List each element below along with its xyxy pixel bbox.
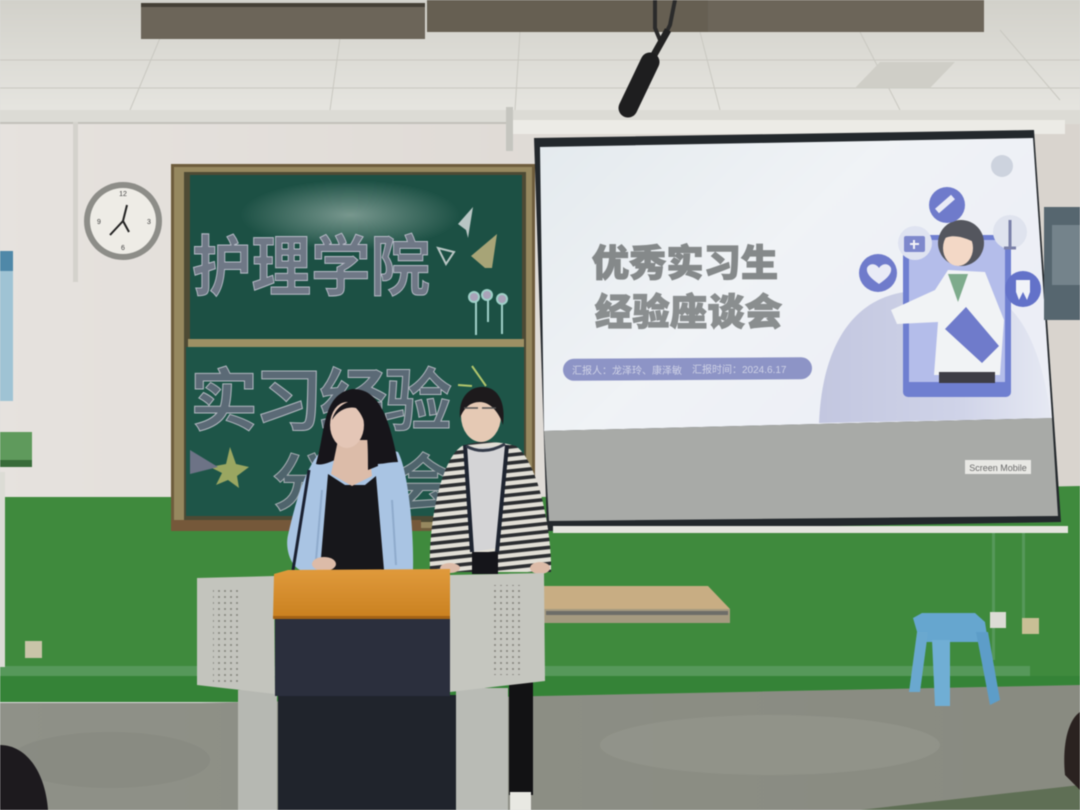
lectern left wing bbox=[197, 576, 275, 694]
slide title: 优秀实习生 bbox=[592, 242, 778, 284]
left wall poster bbox=[0, 251, 13, 401]
wall clock bbox=[84, 182, 162, 260]
screen brand label bbox=[965, 460, 1031, 474]
chalk heading: nursing school: 护理学院 bbox=[192, 230, 430, 304]
presenter pill: 汇报人：龙泽玲、康泽敏 bbox=[572, 364, 682, 377]
person: speaker in blue cardigan bbox=[287, 389, 413, 571]
slide subtitle: 经验座谈会 bbox=[595, 291, 782, 333]
wall clock: 12 bbox=[119, 191, 127, 198]
microphone stand bbox=[293, 470, 309, 570]
floor bbox=[0, 685, 1080, 810]
black top bbox=[320, 474, 384, 570]
lectern navy centre bbox=[275, 618, 450, 696]
lectern bbox=[197, 569, 545, 810]
wall clock: 9 bbox=[97, 219, 101, 226]
ceiling light fixtures bbox=[141, 0, 984, 39]
presenter pill: 汇报时间：2024.6.17 bbox=[692, 363, 787, 376]
doctor coat bbox=[891, 270, 1004, 375]
wall clock: 6 bbox=[121, 245, 125, 252]
chalk paper planes bbox=[438, 207, 497, 268]
ceiling bbox=[0, 0, 1080, 112]
wall bbox=[0, 112, 1080, 498]
side table bbox=[544, 586, 730, 623]
lectern base bbox=[238, 688, 508, 810]
green wall box bbox=[0, 432, 42, 667]
presenter pill bbox=[563, 357, 812, 381]
screen brand label: Screen Mobile bbox=[969, 463, 1027, 473]
chalk flowers bbox=[469, 290, 507, 335]
projector mount and microphone bbox=[506, 0, 675, 151]
icon: first aid bubble bbox=[898, 226, 932, 260]
green wainscot bbox=[0, 486, 1080, 702]
illustration: doctor in phone bbox=[819, 155, 1051, 423]
icon: medicine bubble bbox=[929, 187, 965, 223]
panel: chalkboard bbox=[171, 164, 535, 531]
chalk constellation bbox=[458, 366, 486, 386]
chalk heading: meeting: 分享会 bbox=[272, 450, 454, 519]
icon: syringe bubble bbox=[993, 215, 1027, 249]
ceiling trim bbox=[0, 110, 1080, 282]
panel: projector screen bbox=[534, 130, 1068, 533]
wall sockets bbox=[990, 612, 1039, 634]
icon: heart bubble bbox=[859, 254, 897, 292]
chalk star and comet bbox=[190, 447, 249, 488]
audience heads bbox=[0, 712, 1080, 810]
right wall poster bbox=[1044, 207, 1080, 320]
long hair bbox=[316, 389, 398, 465]
wall clock: 3 bbox=[147, 219, 151, 226]
blue stool bbox=[909, 613, 1000, 706]
lectern wooden top bbox=[273, 569, 450, 619]
icon: tooth bubble bbox=[1005, 271, 1041, 307]
doctor head bbox=[938, 220, 984, 266]
person: presenter in striped cardigan bbox=[430, 387, 551, 810]
lectern right wing bbox=[450, 573, 545, 692]
chalk heading: internship experience: 实习经验 bbox=[190, 364, 452, 440]
